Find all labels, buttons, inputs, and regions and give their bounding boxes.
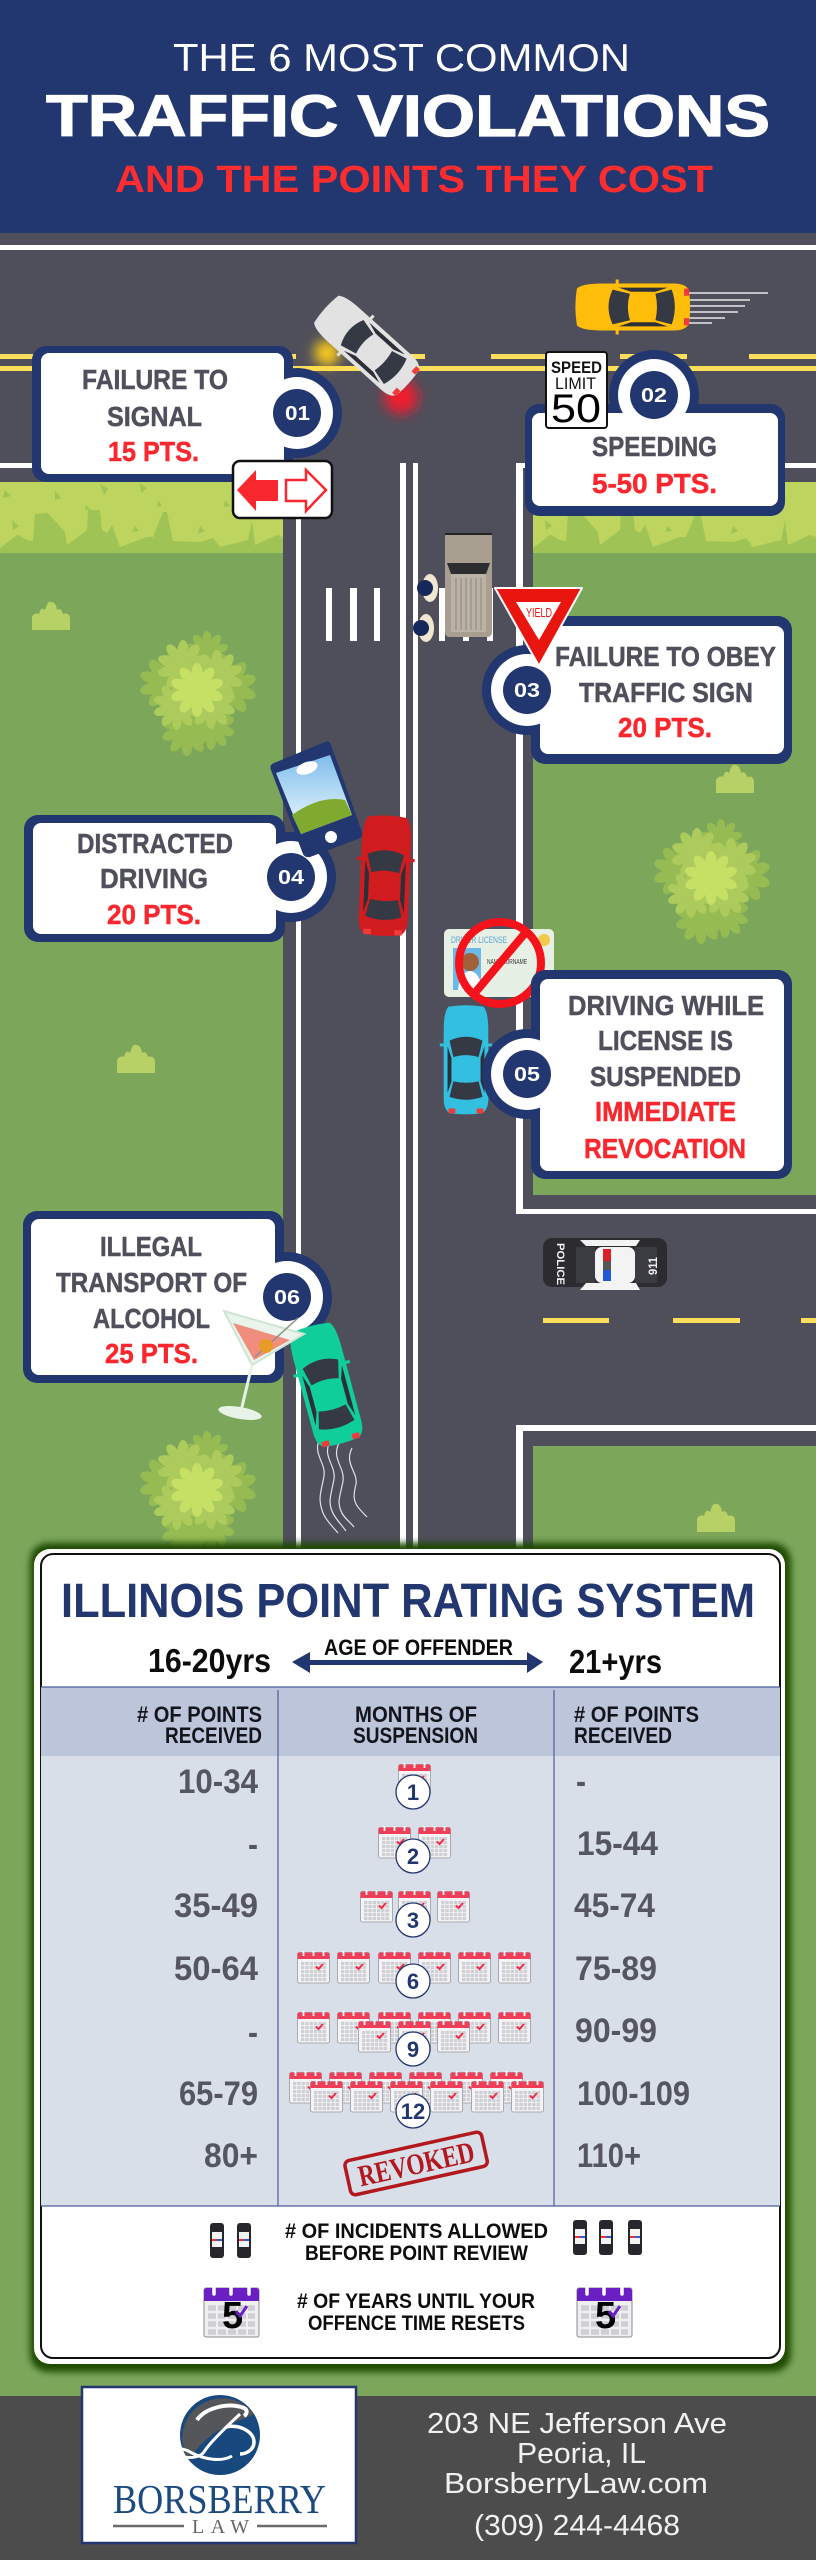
police car — [543, 1238, 667, 1290]
callout 03: failure to obey traffic sign: 03 — [514, 680, 540, 702]
blue car — [440, 1005, 492, 1114]
callout 04: distracted driving: 04 — [278, 867, 305, 889]
icon: speed limit 50 sign: 50 — [551, 387, 601, 431]
callout 01: failure to signal: 15 PTS. — [108, 436, 199, 467]
icon: speed limit 50 sign — [546, 352, 607, 431]
callout 06: illegal transport of alcohol: 06 — [274, 1287, 300, 1309]
points for 16-20 year olds — [174, 1763, 258, 2175]
callout 06: illegal transport of alcohol — [23, 1211, 332, 1383]
points for 16-20 year olds: 80+ — [204, 2137, 258, 2175]
callout 05: driving while license is suspended: LICENSE IS — [598, 1025, 733, 1056]
table headers: MONTHS OF — [355, 1702, 477, 1727]
logo: Borsberry Law — [82, 2387, 356, 2543]
panel: Illinois point rating system — [34, 1549, 785, 2364]
callout 04: distracted driving — [24, 815, 336, 942]
title line 3: AND THE POINTS THEY COST — [115, 159, 713, 201]
icon: driver license with prohibition sign — [444, 922, 554, 1004]
callout 01: failure to signal: 01 — [285, 403, 310, 425]
contact details: 203 NE Jefferson Ave — [427, 2408, 727, 2440]
icon: driver license with prohibition sign: DRIVER LICENSE — [451, 935, 507, 945]
points for 21+ year olds: 45-74 — [574, 1887, 655, 1925]
green car with skid marks — [282, 1319, 370, 1533]
title line 1: THE 6 MOST COMMON — [173, 37, 630, 80]
age of offender axis: 21+yrs — [569, 1643, 662, 1680]
callout 02: speeding — [525, 350, 785, 516]
speeding yellow taxi — [575, 279, 768, 335]
callout 05: driving while license is suspended: DRIVING WHILE — [568, 990, 764, 1021]
points for 16-20 year olds: - — [248, 2014, 258, 2052]
suspension 12 months: 12 — [401, 2099, 425, 2124]
points for 16-20 year olds: 35-49 — [174, 1887, 258, 1925]
trees and bushes — [32, 602, 771, 1556]
red sports car — [354, 814, 416, 937]
points for 21+ year olds: 90-99 — [575, 2012, 657, 2050]
police car: 911 — [646, 1257, 660, 1275]
callout 05: driving while license is suspended — [482, 970, 792, 1179]
incidents allowed row: BEFORE POINT REVIEW — [305, 2242, 528, 2265]
points for 21+ year olds: 75-89 — [575, 1950, 657, 1988]
age of offender axis — [148, 1635, 662, 1680]
suspension 6 months — [298, 1951, 530, 1998]
panel title: ILLINOIS POINT RATING SYSTEM — [61, 1575, 755, 1628]
years until reset row — [204, 2283, 632, 2337]
callout 05: driving while license is suspended: SUSPENDED — [590, 1061, 741, 1092]
callout 01: failure to signal: SIGNAL — [107, 401, 202, 432]
callout 05: driving while license is suspended: 05 — [514, 1064, 540, 1086]
suspension 2 months — [378, 1826, 450, 1873]
callout 04: distracted driving: DISTRACTED — [77, 828, 233, 859]
footer band — [0, 2396, 816, 2560]
callout 02: speeding: 02 — [641, 385, 667, 407]
table headers: # OF POINTS — [137, 1702, 262, 1727]
callout 02: speeding: SPEEDING — [592, 431, 717, 462]
points for 16-20 year olds: - — [248, 1826, 258, 1864]
callout 06: illegal transport of alcohol: ILLEGAL — [100, 1231, 202, 1262]
points for 16-20 year olds: 50-64 — [174, 1950, 258, 1988]
callout 06: illegal transport of alcohol: 25 PTS. — [105, 1338, 198, 1369]
suspension 1 month: 1 — [407, 1780, 419, 1805]
suspension 3 months: 3 — [407, 1908, 419, 1933]
panel shadow — [30, 1543, 791, 2372]
white car turning with signal glows — [307, 288, 427, 414]
callout 05: driving while license is suspended: IMMEDIATE — [595, 1096, 736, 1127]
logo: Borsberry Law: BORSBERRY — [113, 2476, 326, 2522]
suspension 12 months — [290, 2071, 544, 2128]
revoked stamp: REVOKED — [355, 2136, 477, 2193]
icon: martini glass — [217, 1311, 304, 1423]
callout 06: illegal transport of alcohol: ALCOHOL — [93, 1303, 210, 1334]
years until reset row: OFFENCE TIME RESETS — [308, 2312, 525, 2335]
table headers: # OF POINTS — [574, 1702, 699, 1727]
logo: Borsberry Law: LAW — [192, 2516, 249, 2538]
table background — [41, 1687, 780, 2206]
suspension 9 months — [298, 2011, 530, 2066]
icon: yield sign — [495, 588, 582, 666]
callout 06: illegal transport of alcohol: TRANSPORT OF — [56, 1267, 247, 1298]
icon: speed limit 50 sign: SPEED — [551, 358, 602, 377]
icon: smartphone — [270, 741, 362, 857]
police car: POLICE — [554, 1243, 566, 1285]
points for 21+ year olds: - — [576, 1763, 586, 1801]
points for 16-20 year olds: 10-34 — [178, 1763, 258, 1801]
contact details: BorsberryLaw.com — [444, 2468, 708, 2500]
points for 21+ year olds: 15-44 — [577, 1825, 658, 1863]
callout 04: distracted driving: DRIVING — [100, 863, 208, 894]
age of offender axis: AGE OF OFFENDER — [324, 1635, 513, 1660]
pedestrians crossing — [413, 574, 438, 642]
contact details — [427, 2408, 727, 2542]
callout 03: failure to obey traffic sign: 20 PTS. — [618, 712, 712, 743]
table headers: SUSPENSION — [353, 1723, 478, 1748]
table headers: RECEIVED — [574, 1723, 672, 1748]
callout 03: failure to obey traffic sign: TRAFFIC SIGN — [579, 677, 753, 708]
callout 02: speeding: 5-50 PTS. — [592, 468, 717, 499]
callout 05: driving while license is suspended: REVOCATION — [584, 1133, 746, 1164]
suspension 2 months: 2 — [407, 1844, 419, 1869]
points for 16-20 year olds: 65-79 — [179, 2075, 258, 2113]
callout 03: failure to obey traffic sign — [482, 616, 792, 764]
suspension 6 months: 6 — [407, 1969, 419, 1994]
years until reset row: # OF YEARS UNTIL YOUR — [297, 2290, 535, 2313]
contact details: (309) 244-4468 — [474, 2510, 680, 2542]
suspension 9 months: 9 — [407, 2037, 419, 2062]
road network — [0, 233, 816, 1553]
table headers: RECEIVED — [165, 1723, 262, 1748]
hedges — [0, 482, 816, 555]
icon: yield sign: YIELD — [526, 605, 552, 620]
incidents allowed row — [210, 2220, 642, 2265]
icon: speed limit 50 sign: LIMIT — [555, 374, 596, 393]
contact details: Peoria, IL — [517, 2438, 646, 2470]
points for 21+ year olds — [574, 1763, 690, 2175]
points for 21+ year olds: 100-109 — [577, 2075, 690, 2113]
suspension 1 month — [396, 1763, 430, 1809]
age of offender axis: 16-20yrs — [148, 1642, 271, 1679]
points for 21+ year olds: 110+ — [577, 2137, 641, 2175]
header band — [0, 0, 816, 233]
callout 04: distracted driving: 20 PTS. — [107, 899, 201, 930]
icon: turn signal arrow sign — [233, 461, 332, 518]
beige SUV — [445, 533, 492, 637]
callout 01: failure to signal: FAILURE TO — [82, 364, 228, 395]
callout 03: failure to obey traffic sign: FAILURE TO OBEY — [555, 641, 776, 672]
callout 01: failure to signal — [32, 346, 342, 482]
title line 2: TRAFFIC VIOLATIONS — [46, 84, 770, 149]
table headers — [137, 1702, 699, 1748]
suspension 3 months — [360, 1890, 470, 1937]
icon: driver license with prohibition sign: NAME SURNAME — [487, 959, 527, 966]
incidents allowed row: # OF INCIDENTS ALLOWED — [285, 2220, 548, 2243]
